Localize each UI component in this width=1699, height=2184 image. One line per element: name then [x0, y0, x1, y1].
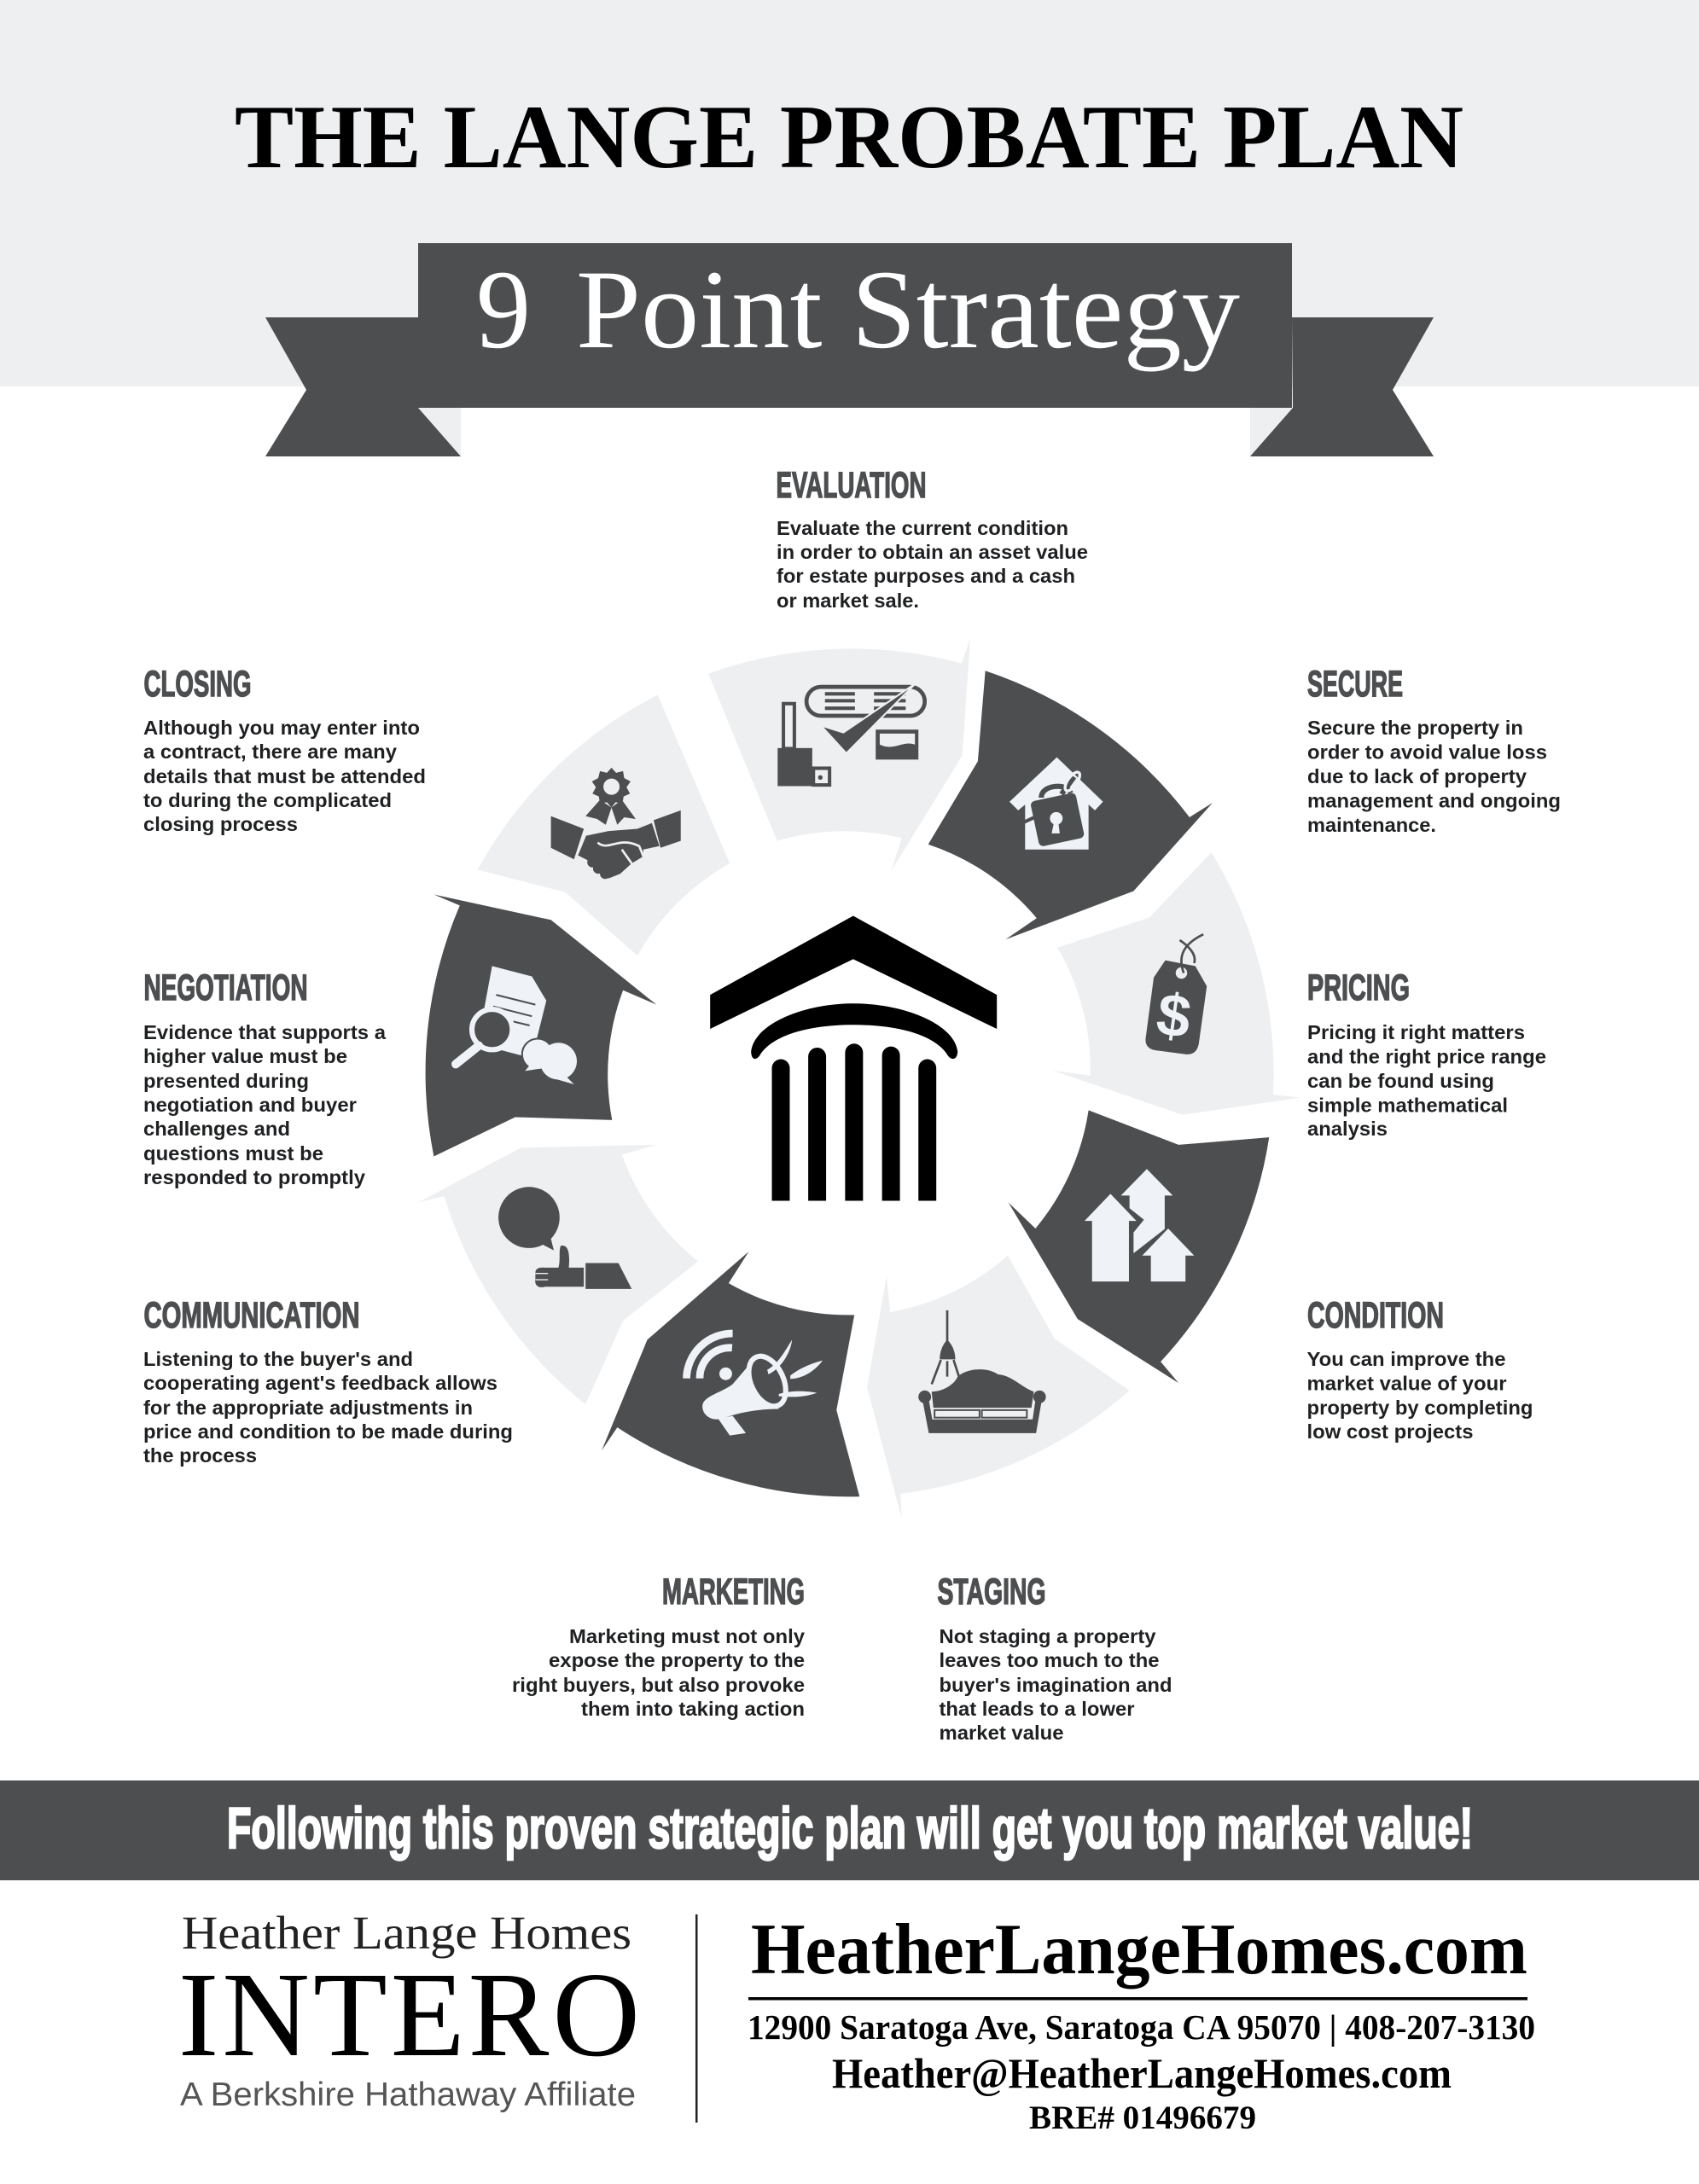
icon: speech bubble and thumb up: [498, 1187, 631, 1289]
segment: marketing: [602, 1252, 859, 1496]
text block: secure: SECURE: [1307, 664, 1403, 705]
text block: evaluation: or market sale.: [777, 590, 919, 612]
icon: handshake and rosette: [551, 768, 681, 879]
text block: evaluation: in order to obtain an asset value: [777, 541, 1088, 563]
text block: closing: closing process: [143, 813, 298, 835]
segment: condition: [1009, 1110, 1269, 1383]
footer contact details: HeatherLangeHomes.com: [751, 1909, 1527, 1989]
text block: condition: CONDITION: [1307, 1295, 1444, 1336]
text block: closing: Although you may enter into: [143, 717, 420, 739]
text block: negotiation: questions must be: [143, 1142, 323, 1165]
text block: pricing: analysis: [1307, 1118, 1388, 1140]
text block: secure: [1307, 664, 1561, 836]
text block: marketing: right buyers, but also provoke: [512, 1674, 805, 1696]
text block: pricing: and the right price range: [1307, 1046, 1546, 1068]
text block: pricing: Pricing it right matters: [1307, 1021, 1525, 1043]
text block: communication: Listening to the buyer's and: [143, 1348, 413, 1370]
ribbon text: Point Strategy: [576, 247, 1240, 372]
footer divider: [695, 1914, 698, 2123]
text block: closing: CLOSING: [143, 664, 251, 705]
segment: evaluation: [708, 638, 970, 871]
footer logo: Intero: A Berkshire Hathaway Affiliate: [180, 2077, 636, 2113]
text block: condition: You can improve the: [1307, 1348, 1506, 1370]
text block: staging: leaves too much to the: [939, 1649, 1160, 1671]
icon: price tag: [1145, 934, 1207, 1054]
text block: evaluation: EVALUATION: [777, 465, 927, 506]
text block: staging: STAGING: [937, 1571, 1046, 1612]
footer logo: Intero: Heather Lange Homes: [182, 1907, 631, 1959]
text block: negotiation: NEGOTIATION: [143, 967, 307, 1008]
icon: document and magnifier: [456, 966, 577, 1084]
call to action bar: [0, 1780, 1699, 1880]
icon: price tag: $: [1153, 979, 1195, 1051]
text block: pricing: simple mathematical: [1307, 1094, 1508, 1116]
text block: negotiation: challenges and: [143, 1118, 290, 1140]
segment: negotiation: [426, 895, 656, 1156]
text block: marketing: Marketing must not only: [569, 1625, 805, 1647]
text block: marketing: [512, 1571, 805, 1720]
text block: secure: due to lack of property: [1307, 765, 1527, 787]
text block: evaluation: for estate purposes and a cash: [777, 565, 1075, 587]
text block: secure: management and ongoing: [1307, 790, 1561, 812]
text block: communication: cooperating agent's feedback allows: [143, 1372, 497, 1394]
footer contact details: 12900 Saratoga Ave, Saratoga CA 95070 | 408-207-3130: [748, 2007, 1535, 2047]
text block: negotiation: higher value must be: [143, 1045, 347, 1067]
text block: communication: the process: [143, 1444, 257, 1467]
footer logo: Intero: [178, 1907, 640, 2113]
footer logo: Intero: INTERO: [178, 1947, 640, 2082]
header band: [0, 0, 1699, 386]
text block: closing: to during the complicated: [143, 789, 392, 811]
footer contact details: BRE# 01496679: [1029, 2100, 1256, 2136]
text block: staging: market value: [939, 1722, 1064, 1744]
segment: staging: [867, 1256, 1130, 1519]
icon: locked house: [1010, 758, 1103, 850]
text block: secure: maintenance.: [1307, 814, 1436, 836]
text block: condition: low cost projects: [1307, 1420, 1473, 1443]
text block: negotiation: [143, 967, 387, 1188]
segment: secure: [928, 671, 1213, 939]
text block: negotiation: negotiation and buyer: [143, 1094, 357, 1116]
text block: pricing: [1307, 967, 1546, 1140]
text block: staging: [937, 1571, 1172, 1744]
ribbon banner: [265, 243, 1434, 456]
text block: closing: [143, 664, 426, 835]
text block: communication: [143, 1295, 513, 1467]
title: THE LANGE PROBATE PLAN: [235, 87, 1463, 187]
strategy wheel: [418, 638, 1300, 1519]
icon: megaphone: [686, 1333, 823, 1436]
text block: marketing: MARKETING: [662, 1571, 805, 1612]
text block: secure: order to avoid value loss: [1307, 741, 1547, 763]
text block: condition: market value of your: [1307, 1372, 1507, 1394]
footer contact details: [748, 1909, 1535, 2136]
text block: marketing: expose the property to the: [549, 1649, 805, 1671]
text block: staging: buyer's imagination and: [939, 1674, 1172, 1696]
text block: evaluation: Evaluate the current condition: [777, 517, 1068, 539]
text block: negotiation: Evidence that supports a: [143, 1021, 387, 1043]
segment: closing: [478, 695, 730, 956]
text block: secure: Secure the property in: [1307, 717, 1523, 739]
ribbon numeral: 9: [476, 247, 531, 372]
text block: communication: for the appropriate adjustments in: [143, 1397, 473, 1419]
text block: pricing: PRICING: [1307, 967, 1410, 1008]
icon: evaluation checklist: [777, 683, 925, 786]
text block: closing: a contract, there are many: [143, 741, 397, 763]
footer contact details: Heather@HeatherLangeHomes.com: [832, 2049, 1452, 2097]
text block: communication: price and condition to be made during: [143, 1420, 513, 1443]
text block: negotiation: responded to promptly: [143, 1166, 365, 1188]
text block: communication: COMMUNICATION: [143, 1295, 360, 1336]
text block: condition: property by completing: [1307, 1397, 1533, 1419]
segment: pricing: [1053, 852, 1300, 1115]
segment: communication: [418, 1145, 698, 1404]
text block: closing: details that must be attended: [143, 765, 426, 787]
text block: condition: [1307, 1295, 1533, 1443]
icon: sofa and lamp: [918, 1310, 1046, 1433]
text block: marketing: them into taking action: [581, 1698, 805, 1720]
text block: pricing: can be found using: [1307, 1070, 1494, 1092]
icon: rising arrows: [1085, 1169, 1194, 1281]
text block: staging: that leads to a lower: [939, 1698, 1135, 1720]
text block: negotiation: presented during: [143, 1070, 309, 1092]
text block: staging: Not staging a property: [939, 1625, 1156, 1647]
center icon: classical column under roof: [710, 916, 997, 1200]
text block: evaluation: [777, 465, 1088, 612]
